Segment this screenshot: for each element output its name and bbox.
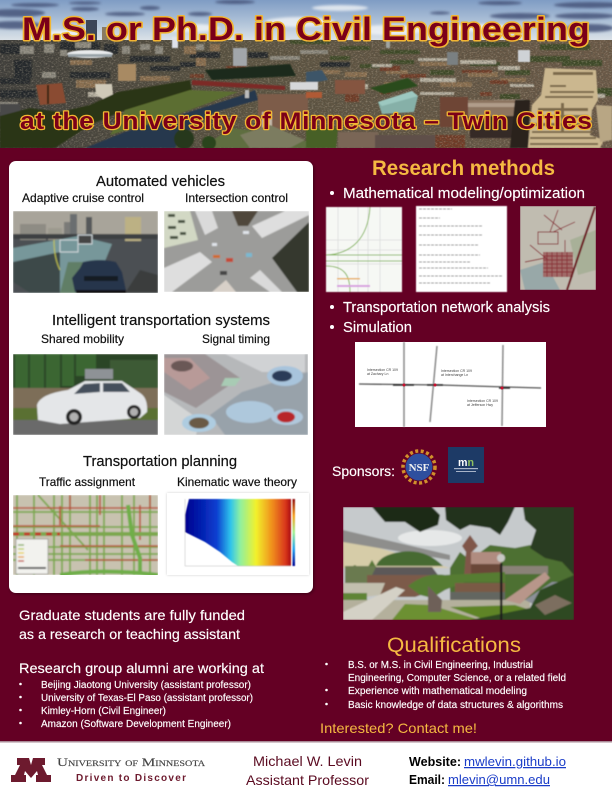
image: signal timing [164,354,308,435]
image: street network map [520,206,596,290]
towers [172,37,178,48]
sponsors label: Sponsors: [332,463,395,479]
tagline: Driven to Discover: Driven to Discover [76,773,186,784]
heading: qualifications: Qualifications [387,634,521,657]
list: qualifications: Experience with mathematical modeling [348,686,527,697]
contact details [409,755,566,787]
tower [462,535,478,578]
footer bar [0,741,612,792]
image: adaptive cruise control [13,211,158,293]
list: qualifications: Basic knowledge of data structures & algorithms [348,700,563,711]
distant towers [86,20,97,42]
logo: NSF [403,451,435,483]
bullet: simulation: Simulation [343,320,412,336]
funding statement [19,607,245,642]
central hedge and building [408,572,505,598]
contact details: mwlevin.github.io [464,755,566,769]
logo: University of Minnesota M [11,758,51,782]
river [85,90,258,148]
logo: MnDOT [448,447,484,483]
heading: alumni: Research group alumni are working at [19,660,264,676]
bridge [192,80,285,90]
image: simulation network: at Interchange Ln [441,373,468,377]
image: simulation network: at Jefferson Hwy [467,403,493,407]
long roof and wall [343,542,448,568]
contact details: Email: [409,773,445,787]
list: qualifications [325,660,566,711]
list: alumni [19,680,253,730]
image: network diagram [326,207,402,292]
list: alumni: Beijing Jiaotong University (assistant professor) [41,680,251,691]
label: kinematic wave theory: Kinematic wave theory [177,475,297,489]
background trees and right-hand foliage [450,545,574,600]
image: simulation network: Intersection CR 109 [367,368,398,372]
funding statement: Graduate students are fully funded [19,607,245,623]
image: intersection control [164,211,309,292]
funding statement: as a research or teaching assistant [19,626,240,642]
image: equations [416,206,507,292]
low building [367,575,435,597]
campus blocks [258,94,308,130]
sculpture [428,586,442,612]
name and title [246,753,369,788]
label: adaptive cruise control: Adaptive cruise control [22,191,144,205]
green bank [110,90,238,135]
list: alumni: University of Texas-El Paso (assistant professor) [41,693,253,704]
trees [0,80,192,148]
plaza [200,128,306,148]
image: simulation network: at Zachary Ln [367,372,388,376]
paving and lawns [343,600,530,620]
header photo: aerial view of campus and city [0,0,612,150]
image: simulation network: Intersection CR 109 [467,399,498,403]
steps left [343,583,385,600]
stadium [67,50,113,58]
contact prompt: Interested? Contact me! [320,720,477,736]
contact details: Website: [409,755,461,769]
tall building [510,100,530,148]
lamp post [500,563,502,620]
name and title: Michael W. Levin [253,753,362,769]
bullet: transportation network analysis: Transportation network analysis [343,300,550,316]
wordmark: University of Minnesota: University of Minnesota [57,755,205,769]
tree canopy [372,507,440,532]
heading: intelligent transportation systems: Intelligent transportation systems [52,313,270,329]
right stairs and foliage [505,572,550,604]
image: simulation network: Intersection CR 109 [441,369,472,373]
name and title: Assistant Professor [246,772,369,788]
contact details: mlevin@umn.edu [448,773,550,787]
title: M.S. or Ph.D. in Civil Engineering [22,12,590,48]
image: campus photo [343,507,574,620]
list: qualifications: Engineering, Computer Science, or a related field [348,673,566,684]
red-brown building [36,83,66,105]
label: intersection control: Intersection control [185,191,288,205]
image: simulation network [355,342,546,427]
subtitle: at the University of Minnesota – Twin Cities [20,108,592,135]
label: shared mobility: Shared mobility [41,332,124,346]
list: alumni: Amazon (Software Development Engineer) [41,719,231,730]
list: qualifications: B.S. or M.S. in Civil Engineering, Industrial [348,660,533,671]
list: alumni: Kimley-Horn (Civil Engineer) [41,706,166,717]
label: signal timing: Signal timing [202,332,270,346]
chart: kinematic wave contour [167,493,309,575]
heading: research methods: Research methods [372,157,555,180]
logo: NSF: NSF [409,462,430,474]
bullet: mathematical modeling: Mathematical modeling/optimization [343,186,585,202]
image: traffic assignment map [13,495,158,575]
panel: research topics [9,161,313,593]
label: traffic assignment: Traffic assignment [39,475,136,489]
heading: automated vehicles: Automated vehicles [96,174,225,190]
logo: MnDOT: mn [458,457,474,469]
image: shared mobility [13,354,158,435]
heading: transportation planning: Transportation planning [83,454,237,470]
